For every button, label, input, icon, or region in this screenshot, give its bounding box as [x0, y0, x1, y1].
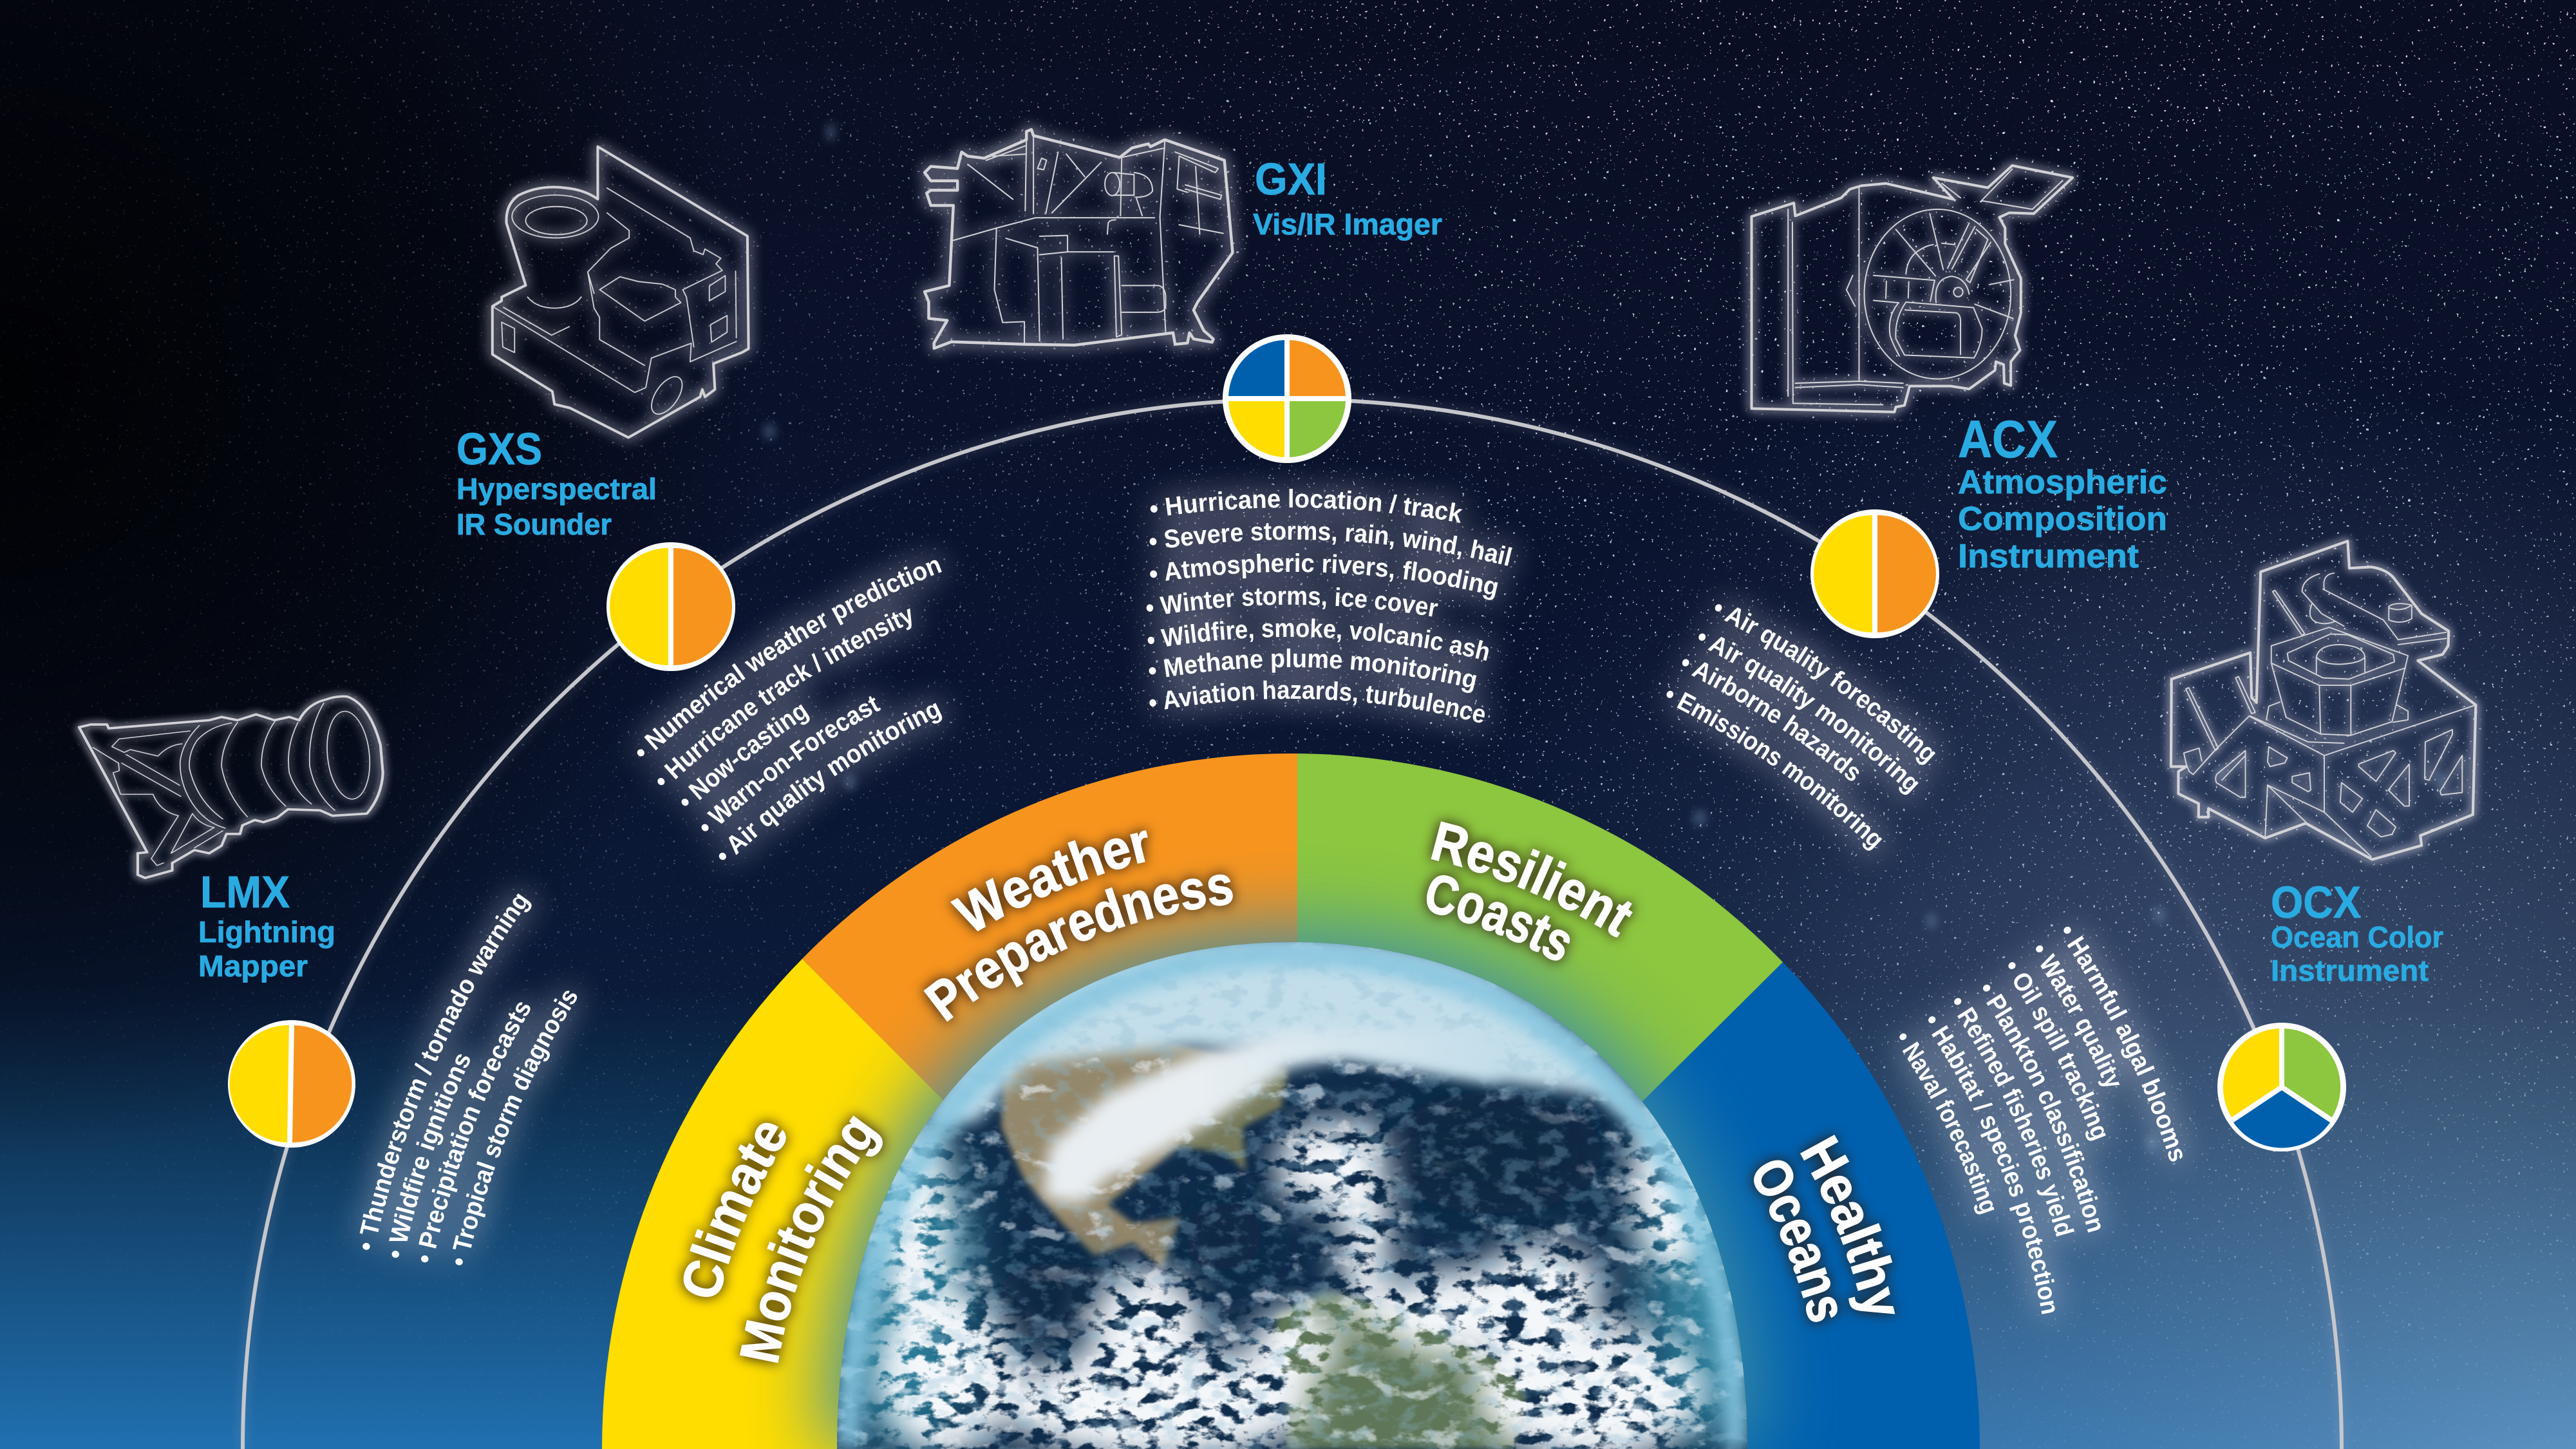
text block: OCX applications: • Naval forecasting [1867, 1026, 2026, 1224]
text block: GXS applications: • Hurricane track / intensity [648, 562, 925, 831]
label: GXI vis/IR imager: Vis/IR Imager [1253, 207, 1442, 241]
text block: OCX applications: • Plankton classification [1937, 977, 2147, 1243]
text block: OCX applications: • Refined fisheries yield [1909, 990, 2114, 1247]
text block: GXI applications: • Winter storms, ice cover [1143, 545, 1445, 671]
text block: OCX applications: • Oil spill tracking [1979, 954, 2134, 1149]
text block: LMX applications: • Tropical storm diagnosis [444, 972, 586, 1280]
icon: OCX instrument [2171, 541, 2476, 860]
label: LMX lightning mapper [198, 867, 335, 983]
label: LMX lightning mapper: Lightning [198, 915, 335, 949]
wheel labels [668, 778, 1941, 1378]
icon: GXI instrument [925, 129, 1232, 348]
text block: GXS applications: • Numerical weather prediction [628, 500, 953, 815]
icon: LMX objective dot [228, 1020, 355, 1148]
icon: LMX instrument [79, 696, 383, 878]
land: north america [1001, 1030, 1288, 1269]
label: healthy oceans: Oceans [1716, 1146, 1883, 1343]
text block: LMX applications: • Wildfire ignitions [381, 1043, 478, 1267]
sector: healthy oceans blue [1292, 815, 2009, 1449]
icon: GXI objective dot [1223, 334, 1351, 463]
text block: GXI applications: • Aviation hazards, turbulence [1146, 627, 1494, 790]
label: climate monitoring [668, 1090, 894, 1378]
text block: GXI applications: • Severe storms, rain, wind, hail [1147, 473, 1519, 626]
text block: ACX applications [1642, 594, 1960, 858]
text block: GXS applications [628, 500, 953, 900]
icon: ACX instrument [1752, 166, 2073, 412]
white storm band [1043, 1030, 1500, 1204]
label: OCX ocean color instrument: Instrument [2271, 954, 2429, 987]
text block: ACX applications: • Air quality monitoring [1675, 623, 1944, 802]
text block: GXI applications: • Hurricane location / track [1147, 449, 1469, 574]
label: GXS hyperspectral IR sounder: Hyperspectral [456, 472, 657, 506]
text block: GXS applications: • Now-casting [672, 686, 816, 826]
label: LMX lightning mapper: Mapper [198, 949, 308, 983]
label: climate monitoring: Monitoring [728, 1090, 894, 1378]
land: south america [1272, 1291, 1526, 1449]
text block: OCX applications: • Water quality [2013, 938, 2140, 1097]
text block: GXI applications: • Methane plume monitoring [1145, 599, 1485, 752]
text block: GXI applications [1143, 449, 1519, 790]
label: LMX lightning mapper: LMX [200, 867, 290, 917]
text block: OCX applications: • Habitat / species protection [1863, 1009, 2121, 1326]
text block: ACX applications: • Air quality forecasting [1691, 594, 1960, 772]
sector: weather preparedness orange [713, 708, 1297, 1449]
earth globe [831, 934, 1764, 1449]
label: weather preparedness: Preparedness [916, 864, 1243, 1029]
label: GXS hyperspectral IR sounder: GXS [456, 424, 542, 474]
sector: climate monitoring yellow [602, 959, 943, 1449]
label: healthy oceans [1716, 1125, 1941, 1343]
label: GXS hyperspectral IR sounder: IR Sounder [456, 507, 612, 541]
label: ACX atmospheric composition instrument: Instrument [1958, 538, 2139, 575]
label: OCX ocean color instrument: Ocean Color [2271, 920, 2443, 954]
label: OCX ocean color instrument: OCX [2271, 877, 2361, 927]
atmosphere glow around earth [821, 926, 1763, 1449]
panel: mission objective wheel [602, 753, 1980, 1449]
text block: ACX applications: • Emissions monitoring [1642, 680, 1908, 858]
label: healthy oceans: Healthy [1764, 1125, 1941, 1339]
label: weather preparedness [913, 778, 1262, 1101]
label: weather preparedness: Weather [944, 822, 1156, 939]
text block: GXS applications: • Air quality monitoring [710, 663, 952, 900]
label: ACX atmospheric composition instrument: Composition [1958, 500, 2167, 538]
text block: GXS applications: • Warn-on-Forecast [692, 669, 889, 860]
text block: OCX applications: • Harmful algal blooms [2024, 919, 2223, 1171]
label: climate monitoring: Climate [668, 1099, 805, 1313]
text block: GXI applications: • Wildfire, smoke, volcanic ash [1145, 567, 1498, 724]
label: OCX ocean color instrument [2271, 877, 2443, 987]
veil texture [934, 942, 1642, 1058]
cloud systems [876, 1095, 1719, 1449]
label: resilient coasts: Resilient [1418, 810, 1652, 952]
text block: LMX applications: • Thunderstorm / tornado warning [352, 870, 537, 1270]
dark open ocean patches [992, 1092, 1603, 1340]
icon: GXS objective dot [606, 542, 735, 671]
label: ACX atmospheric composition instrument: ACX [1958, 410, 2058, 469]
icon: GXS instrument [493, 147, 749, 437]
label: GXI vis/IR imager [1253, 154, 1442, 241]
icon: OCX objective dot [2217, 1023, 2346, 1151]
atmosphere limb [837, 942, 1747, 1449]
label: ACX atmospheric composition instrument: Atmospheric [1958, 464, 2167, 501]
sector: resilient coasts green [1292, 708, 1932, 1449]
icon: ACX objective dot [1810, 509, 1939, 638]
cloud texture [831, 1108, 1758, 1449]
label: resilient coasts: Coasts [1413, 861, 1589, 978]
text block: ACX applications: • Airborne hazards [1664, 649, 1879, 790]
polar cloud veil [927, 939, 1674, 1153]
label: GXS hyperspectral IR sounder [456, 424, 657, 541]
orbit arc line [241, 397, 2344, 1449]
text block: OCX applications [1863, 919, 2223, 1326]
text block: LMX applications: • Precipitation forecasts [410, 986, 539, 1275]
label: GXI vis/IR imager: GXI [1255, 154, 1327, 204]
label: ACX atmospheric composition instrument [1958, 410, 2167, 575]
text block: GXI applications: • Atmospheric rivers, flooding [1147, 506, 1506, 656]
ocean teal limbs [831, 1127, 1764, 1449]
